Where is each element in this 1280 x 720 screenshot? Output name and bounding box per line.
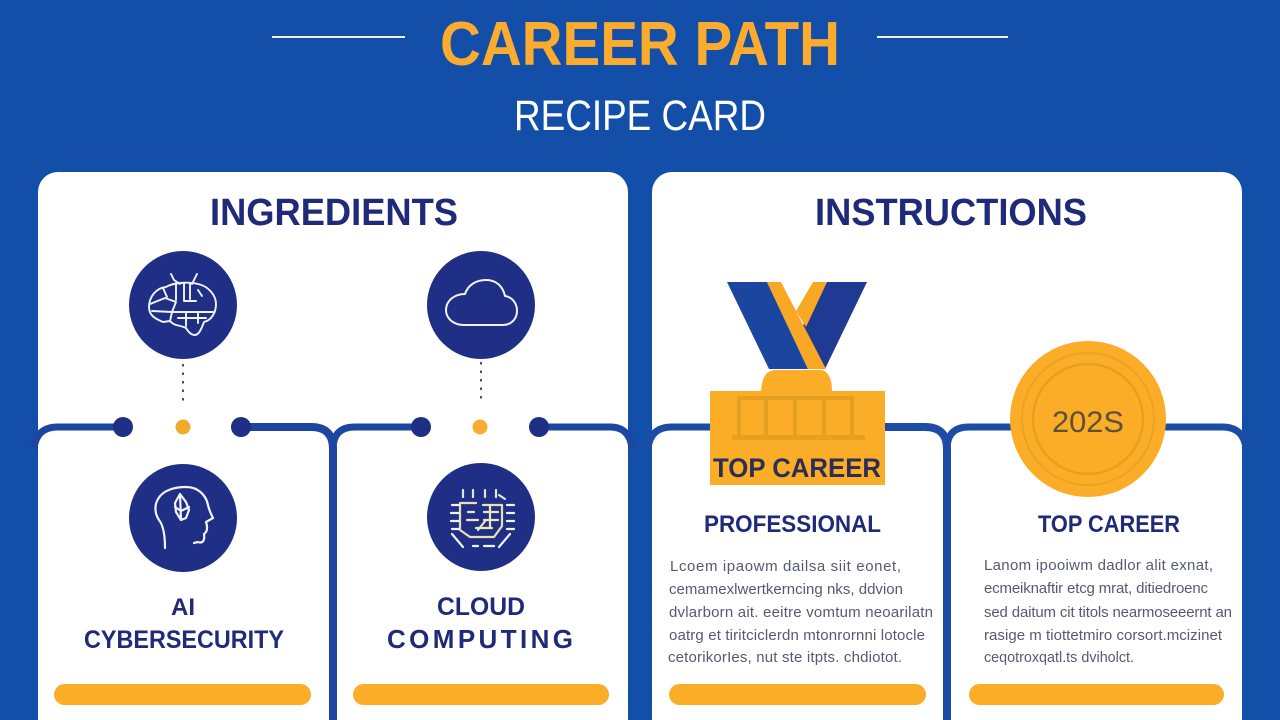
panel: instructions — [648, 172, 1246, 720]
icon: head with idea — [129, 464, 237, 572]
bar: ai cybersecurity — [54, 684, 311, 705]
text block: professional: cemamexlwertkerncing nks, ddvion — [669, 581, 903, 598]
icon: cloud — [427, 251, 535, 359]
subtitle: recipe card: RECIPE CARD — [514, 92, 766, 140]
text block: top career: rasige m tiottetmiro corsort.mcizinet — [984, 627, 1223, 644]
icon: circuit brain — [129, 251, 237, 359]
text block: top career: ecmeiknaftir etcg mrat, ditiedroenc — [984, 580, 1208, 597]
label: cloud computing — [387, 593, 573, 654]
dotted line: brain — [182, 364, 184, 402]
icon: circuit chip — [427, 463, 535, 571]
text block: professional: cetorikorIes, nut ste itpts. chdiotot. — [668, 649, 902, 666]
text block: professional — [668, 558, 933, 666]
text block: top career: ceqotroxqatl.ts dviholct. — [984, 649, 1134, 666]
heading: instructions: INSTRUCTIONS — [815, 192, 1087, 234]
label: ai cybersecurity — [84, 594, 284, 654]
bar: professional — [669, 684, 926, 705]
heading: professional: PROFESSIONAL — [704, 511, 881, 538]
text block: professional: oatrg et tiritciclerdn mtonrornni lotocle — [669, 627, 925, 644]
title: career path: CAREER PATH — [440, 10, 840, 79]
bar: top career — [969, 684, 1224, 705]
text block: top career: sed daitum cit titols nearmoseeernt an — [984, 604, 1232, 621]
label: ai cybersecurity: CYBERSECURITY — [84, 626, 284, 654]
text block: professional: Lcoem ipaowm dailsa siit eonet, — [670, 558, 901, 575]
label: ai cybersecurity: AI — [171, 594, 195, 621]
label: cloud computing: CLOUD — [437, 593, 525, 621]
icon: gold coin — [1010, 341, 1166, 497]
connector: instructions cards — [648, 427, 1246, 720]
connector: ingredients cards — [34, 427, 632, 720]
heading: ingredients: INGREDIENTS — [210, 192, 458, 234]
text block: professional: dvlarborn ait. eeitre vomtum neoarilatn — [669, 604, 933, 621]
heading: top career: TOP CAREER — [1038, 511, 1180, 538]
panel: ingredients — [34, 172, 632, 720]
icon: medal badge — [710, 282, 885, 485]
coin year: 202S — [1052, 406, 1124, 439]
bar: cloud computing — [353, 684, 609, 705]
text block: top career: Lanom ipooiwm dadlor alit exnat, — [984, 557, 1213, 574]
connector nodes — [113, 417, 549, 437]
badge text: TOP CAREER — [713, 453, 881, 483]
text block: top career — [984, 557, 1232, 666]
label: cloud computing: COMPUTING — [387, 624, 573, 654]
dotted line: cloud — [480, 362, 482, 402]
